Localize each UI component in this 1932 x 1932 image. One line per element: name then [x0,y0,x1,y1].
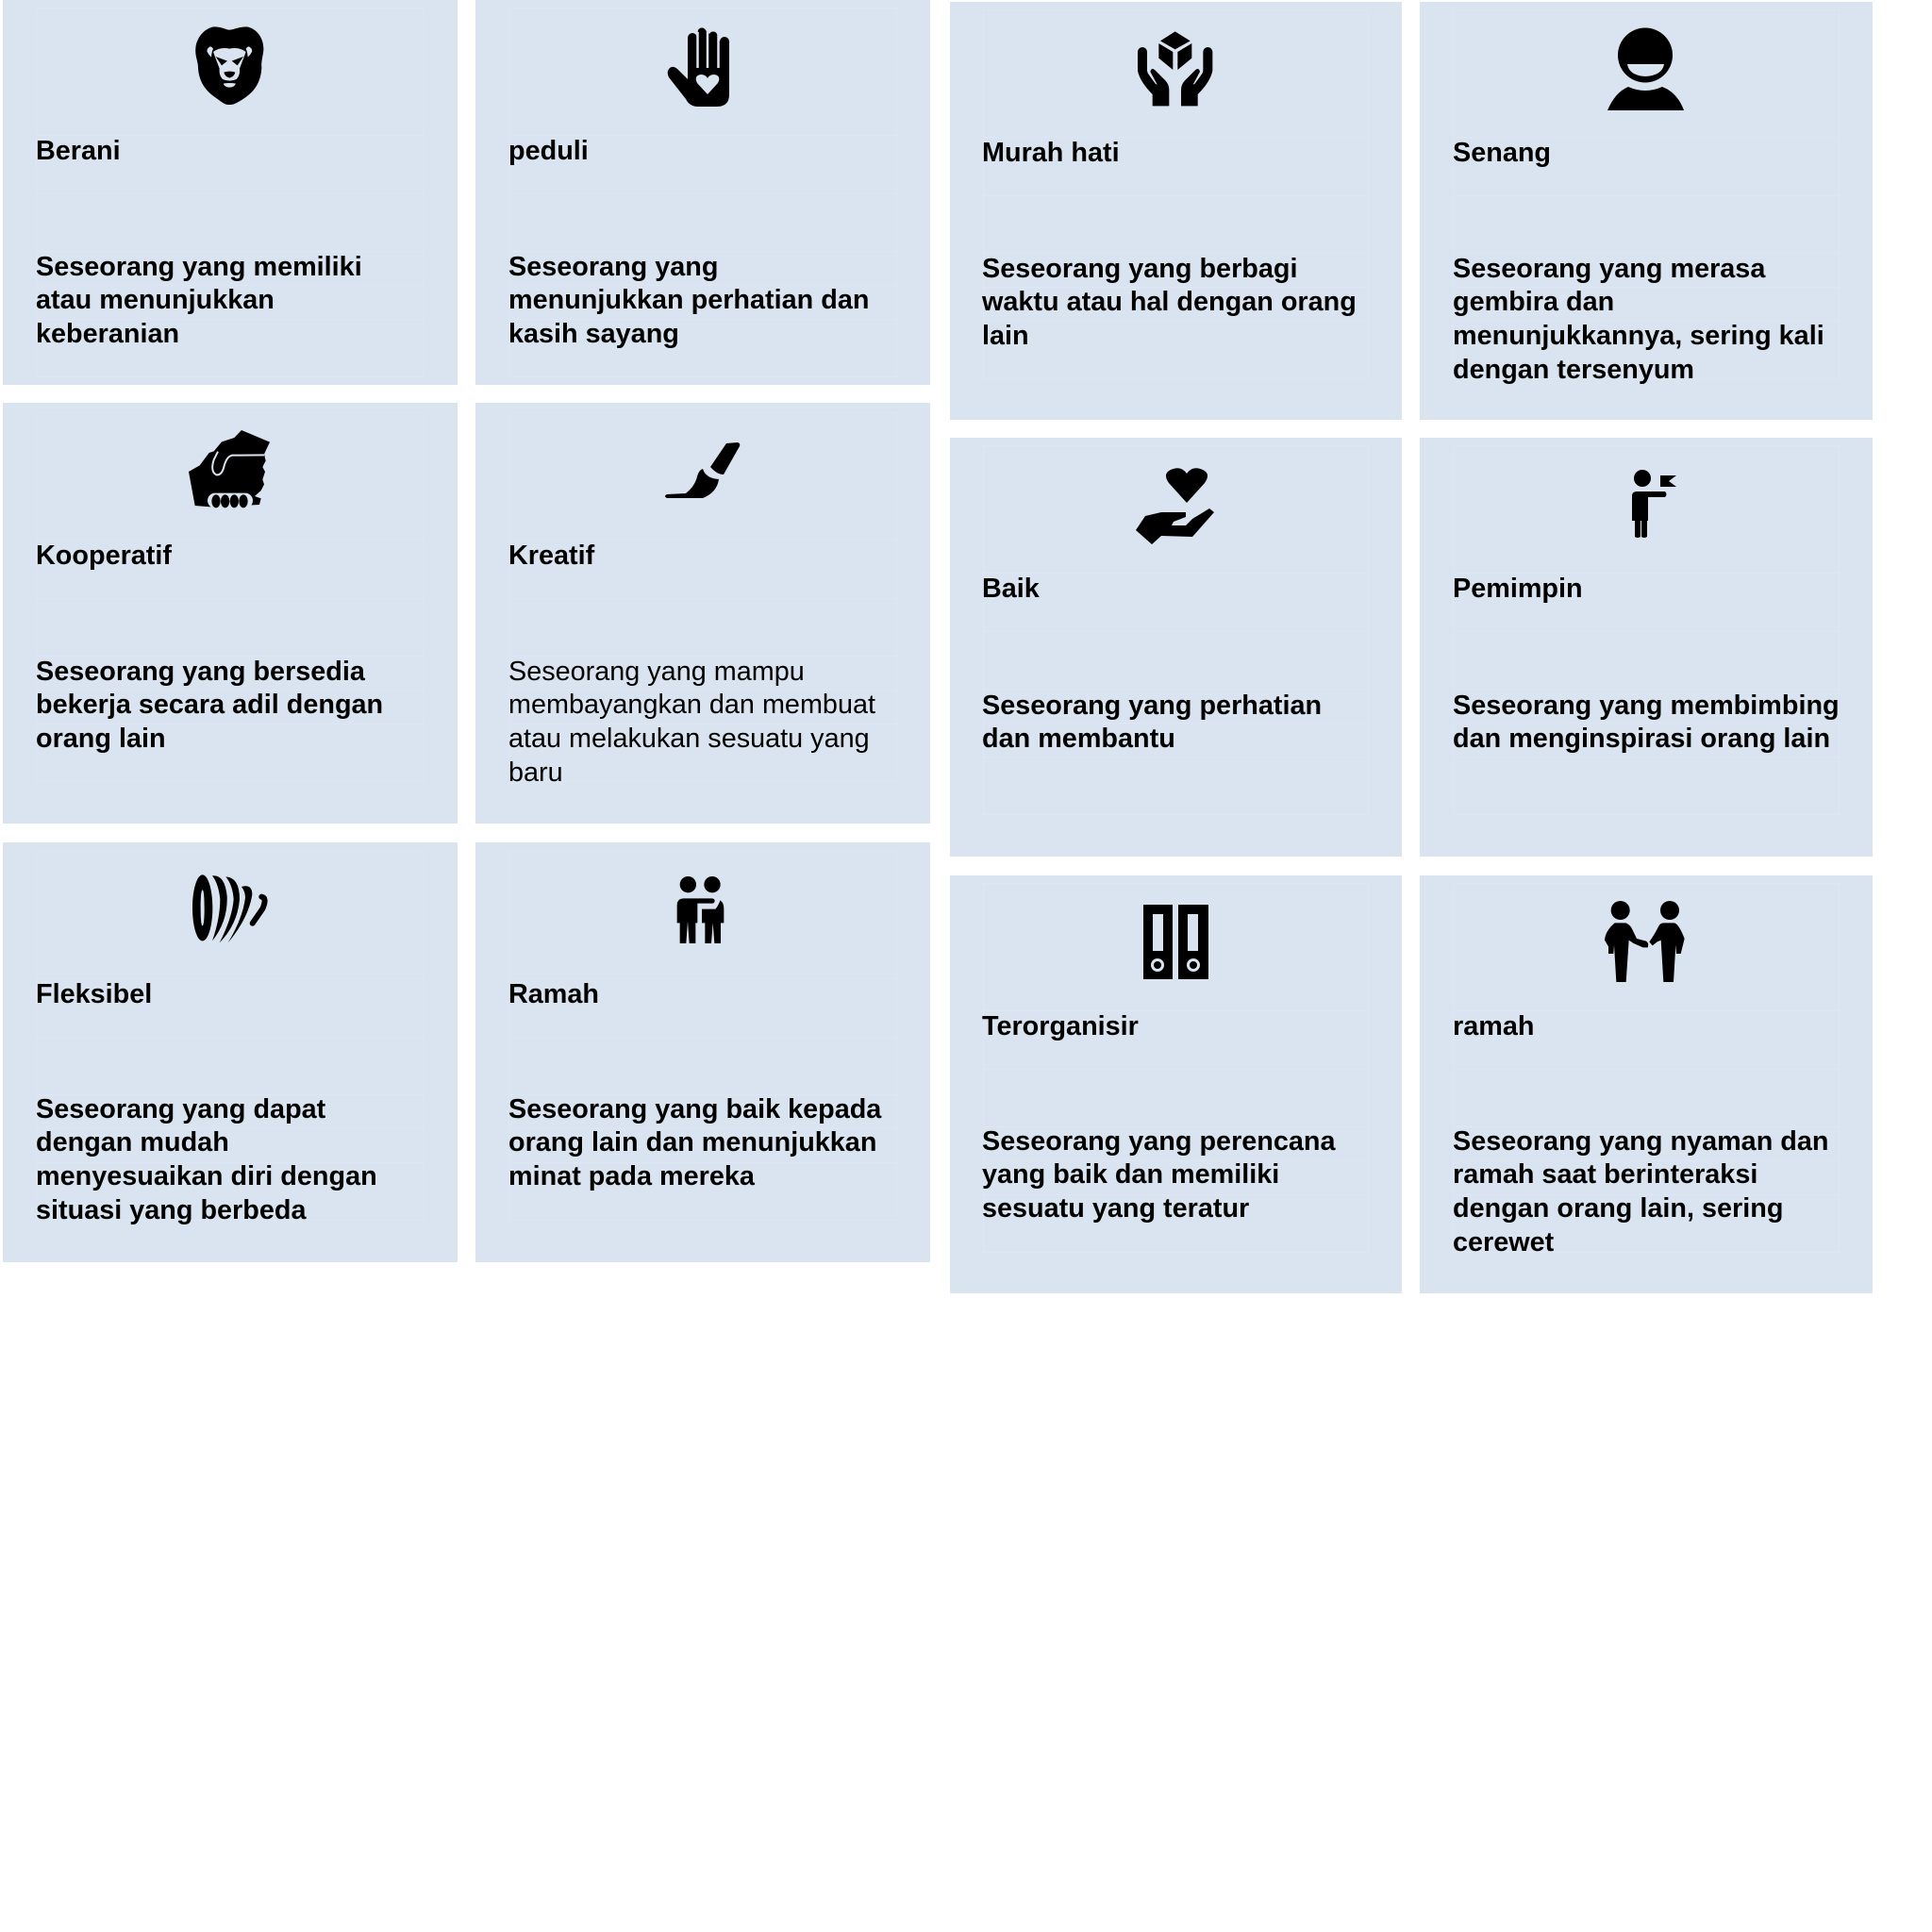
text [1453,253,1824,385]
icon: hand with heart above [1136,468,1214,544]
icon: leader with flag [1632,470,1676,538]
panel: Murah hati [950,2,1402,420]
text: atau menunjukkan [36,285,275,315]
heading: Murah hati [982,138,1120,168]
text: Seseorang yang bersedia [36,657,365,687]
icon: handshake grip [189,430,270,508]
text: dan membantu [982,724,1175,754]
text: keberanian [36,319,179,349]
icon: two people shaking hands [1605,901,1685,982]
icon: hands holding box [1138,31,1213,106]
heading: Kooperatif [36,540,172,570]
heading: ramah [1453,1011,1534,1041]
heading: Terorganisir [982,1011,1139,1041]
panel: Kreatif [475,403,930,824]
panel: Pemimpin [1420,438,1873,857]
text: waktu atau hal dengan orang [982,287,1357,317]
text: bekerja secara adil dengan [36,690,383,720]
text [36,251,362,349]
text: Seseorang yang mampu [508,657,805,687]
text [981,253,1357,351]
text: Seseorang yang merasa [1453,253,1765,283]
text: orang lain dan menunjukkan [508,1127,876,1158]
text: dengan orang lain, sering [1453,1193,1783,1224]
text: membayangkan dan membuat [508,690,875,720]
text [1453,1126,1828,1257]
text: ramah saat berinteraksi [1453,1159,1757,1190]
heading: Fleksibel [36,979,152,1009]
text: Seseorang yang perhatian [982,691,1322,721]
text [982,691,1322,754]
text [36,1094,377,1225]
text: Seseorang yang [508,251,718,281]
text: dengan mudah [36,1127,229,1158]
heading: Kreatif [508,540,594,570]
icon: lion [195,26,264,105]
text: lain [982,321,1029,351]
panel: Baik [950,438,1402,857]
text [1453,691,1840,754]
panel: Ramah [475,842,930,1262]
text: Seseorang yang baik kepada [508,1094,881,1124]
text: Seseorang yang memiliki [36,251,362,281]
text: Seseorang yang membimbing [1453,691,1840,721]
text [508,1094,881,1191]
text: sesuatu yang teratur [982,1193,1249,1224]
text: Seseorang yang berbagi [982,253,1297,283]
text: Seseorang yang perencana [982,1126,1336,1157]
text [36,657,383,754]
panel: peduli [475,0,930,385]
text: menyesuaikan diri dengan [36,1161,377,1191]
text: cerewet [1453,1227,1554,1257]
text: Seseorang yang dapat [36,1094,325,1124]
panel: Kooperatif [3,403,458,824]
heading: peduli [508,136,589,166]
text: dan menginspirasi orang lain [1453,724,1830,754]
text: menunjukkan perhatian dan [508,285,869,315]
icon: two friends [677,876,724,943]
icon: binders [1143,905,1208,979]
icon: smiling person [1607,28,1684,110]
text: minat pada mereka [508,1161,755,1191]
text: dengan tersenyum [1453,355,1694,385]
panel: Berani [3,0,458,385]
text: situasi yang berbeda [36,1195,306,1225]
heading: Ramah [508,979,599,1009]
heading: Berani [36,136,121,166]
panel: Fleksibel [3,842,458,1262]
heading: Pemimpin [1453,574,1583,604]
text: yang baik dan memiliki [982,1159,1279,1190]
panel: ramah [1420,875,1873,1293]
text [508,657,875,788]
text: atau melakukan sesuatu yang [508,724,870,754]
text: gembira dan [1453,287,1614,317]
text [982,1126,1336,1224]
text [508,251,869,349]
heading: Senang [1453,138,1551,168]
icon: flexible coil [192,874,268,943]
text: orang lain [36,724,166,754]
text: menunjukkannya, sering kali [1453,321,1824,351]
heading: Baik [982,574,1040,604]
panel: Senang [1420,2,1873,420]
icon: hand with heart [668,28,729,107]
text: baru [508,758,563,788]
text: kasih sayang [508,319,679,349]
text: Seseorang yang nyaman dan [1453,1126,1828,1157]
icon: paint brush [665,442,740,498]
panel: Terorganisir [950,875,1402,1293]
